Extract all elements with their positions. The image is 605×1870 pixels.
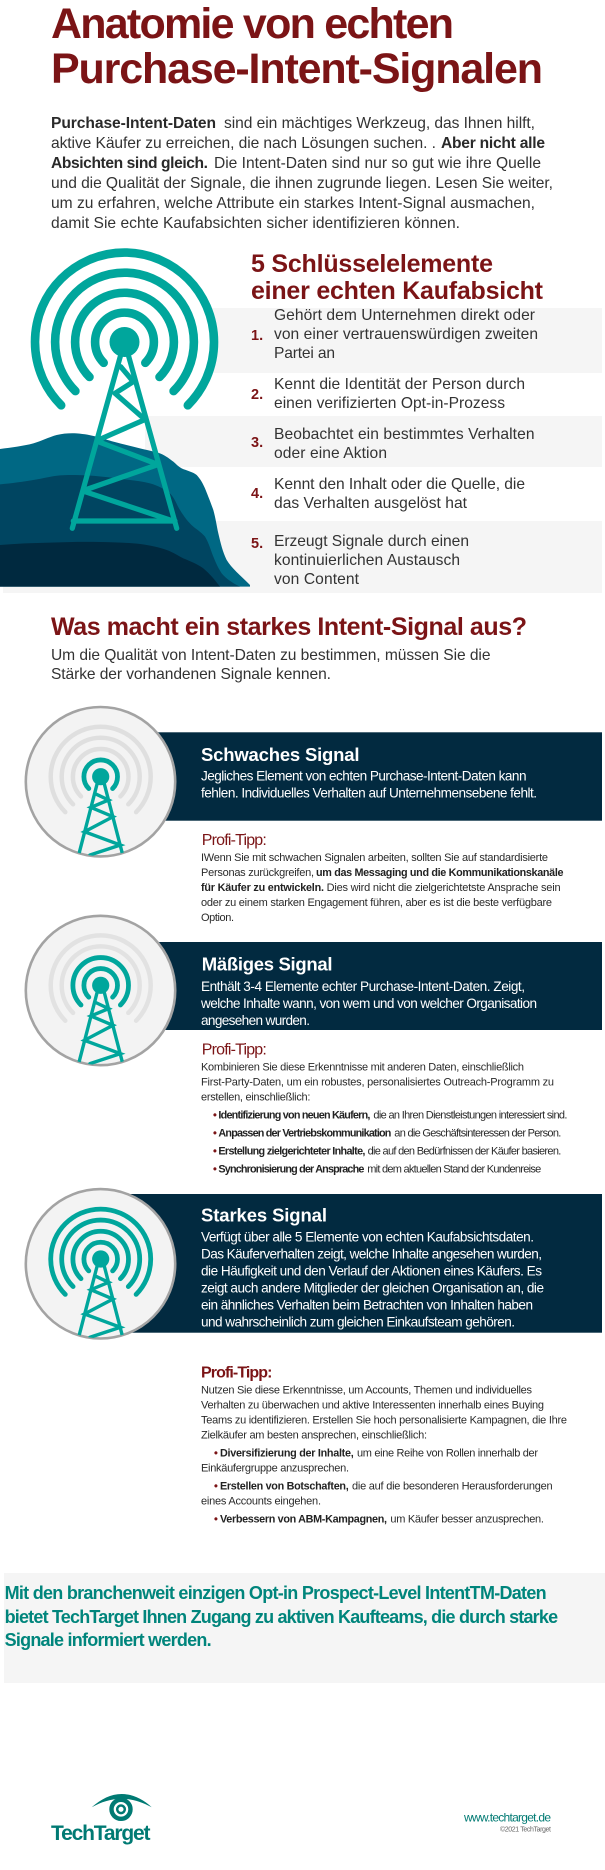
intro paragraph: um zu erfahren, welche Attribute ein starkes Intent-Signal ausmachen, bbox=[51, 195, 535, 212]
pro tip: moderate signal bbox=[201, 1042, 567, 1176]
pro tip: strong signal: • bbox=[214, 1481, 218, 1493]
panel: closing statement bbox=[4, 1573, 605, 1683]
list item 5: Erzeugt Signale durch einen bbox=[274, 533, 469, 550]
strong signal description bbox=[201, 1230, 544, 1330]
strong signal band bbox=[120, 1194, 602, 1333]
intro paragraph: aktive Käufer zu erreichen, die nach Lösungen suchen. . bbox=[51, 135, 436, 152]
pro tip: moderate signal: • bbox=[213, 1164, 217, 1176]
pro tip: strong signal: • bbox=[214, 1514, 218, 1526]
illustration: mountain bbox=[0, 433, 250, 587]
strong signal description: Verfügt über alle 5 Elemente von echten Kaufabsichtsdaten. bbox=[201, 1230, 534, 1245]
pro tip: strong signal: Verhalten zu überwachen und aktive Interessenten innerhalb eines Buying bbox=[201, 1400, 544, 1412]
list item 2 bbox=[251, 376, 525, 412]
pro tip: strong signal: eines Accounts eingehen. bbox=[201, 1496, 321, 1508]
strong signal description: ein ähnliches Verhalten beim Betrachten von Inhalten haben bbox=[201, 1298, 533, 1313]
pro tip: moderate signal: Identifizierung von neuen Käufern, bbox=[218, 1110, 370, 1122]
pro tip: strong signal: Erstellen von Botschaften, bbox=[220, 1481, 349, 1493]
pro tip: moderate signal: Kombinieren Sie diese Erkenntnisse mit anderen Daten, einschließlich bbox=[201, 1062, 524, 1074]
list item 1: Partei an bbox=[274, 345, 335, 362]
heading: 5 key elements bbox=[251, 250, 544, 305]
moderate signal description: Enthält 3-4 Elemente echter Purchase-Intent-Daten. Zeigt, bbox=[201, 979, 525, 994]
moderate signal description: angesehen wurden. bbox=[201, 1013, 310, 1028]
pro tip: strong signal: Teams zu identifizieren. Erstellen Sie hoch personalisierte Kampagnen, die Ihre bbox=[201, 1415, 567, 1427]
panel: list background bands bbox=[3, 308, 602, 593]
pro tip: moderate signal: Synchronisierung der Ansprache bbox=[218, 1164, 364, 1176]
list item 1: von einer vertrauenswürdigen zweiten bbox=[274, 326, 538, 343]
intro paragraph: Aber nicht alle bbox=[441, 135, 545, 152]
pro tip: weak signal: für Käufer zu entwickeln. bbox=[201, 882, 324, 894]
logo: TechTarget: TechTarget bbox=[51, 1822, 150, 1845]
intro paragraph: Purchase-Intent-Daten bbox=[51, 115, 216, 132]
icon: strong signal tower bbox=[26, 1189, 175, 1341]
list item 2: einen verifizierten Opt-in-Prozess bbox=[274, 395, 505, 412]
panel: moderate signal bbox=[26, 916, 602, 1067]
icon: radio tower bbox=[72, 355, 177, 528]
panel: closing statement: Mit den branchenweit einzigen Opt-in Prospect-Level IntentTM-Daten bbox=[5, 1583, 547, 1603]
pro tip: weak signal: Profi-Tipp: bbox=[202, 832, 267, 849]
list item 5: 5. bbox=[251, 536, 263, 552]
subheading text: Stärke der vorhandenen Signale kennen. bbox=[51, 666, 331, 683]
list item 1: 1. bbox=[251, 328, 263, 344]
weak signal band bbox=[120, 732, 602, 821]
list item 2: Kennt die Identität der Person durch bbox=[274, 376, 525, 393]
pro tip: moderate signal: Anpassen der Vertriebskommunikation bbox=[218, 1128, 391, 1140]
pro tip: strong signal: Verbessern von ABM-Kampagnen, bbox=[220, 1514, 387, 1526]
logo: TechTarget bbox=[51, 1794, 152, 1845]
intro paragraph: Die Intent-Daten sind nur so gut wie ihre Quelle bbox=[214, 155, 541, 172]
heading: strong signal question: Was macht ein starkes Intent-Signal aus? bbox=[51, 613, 527, 641]
pro tip: moderate signal: Profi-Tipp: bbox=[202, 1042, 267, 1059]
list item 4: 4. bbox=[251, 486, 263, 502]
list item 3: 3. bbox=[251, 435, 263, 451]
pro tip: strong signal bbox=[201, 1365, 567, 1526]
pro tip: moderate signal: die auf den Bedürfnissen der Käufer basieren. bbox=[368, 1146, 561, 1158]
title: Anatomie von echten bbox=[51, 0, 454, 48]
list item 1: Gehört dem Unternehmen direkt oder bbox=[274, 307, 535, 324]
subheading text bbox=[51, 647, 490, 683]
weak signal description bbox=[201, 769, 537, 801]
list item 4: das Verhalten ausgelöst hat bbox=[274, 495, 468, 512]
pro tip: strong signal: um eine Reihe von Rollen innerhalb der bbox=[357, 1448, 538, 1460]
heading: 5 key elements: einer echten Kaufabsicht bbox=[251, 277, 544, 305]
pro tip: strong signal: Zielkäufer am besten ansprechen, einschließlich: bbox=[201, 1430, 427, 1442]
pro tip: weak signal: IWenn Sie mit schwachen Signalen arbeiten, sollten Sie auf standardisierte bbox=[201, 852, 548, 864]
list item 2: 2. bbox=[251, 387, 263, 403]
panel: closing statement: bietet TechTarget Ihnen Zugang zu aktiven Kaufteams, die durch starke bbox=[5, 1607, 558, 1627]
title bbox=[51, 0, 543, 93]
footer: website and copyright: www.techtarget.de bbox=[463, 1811, 551, 1825]
pro tip: weak signal: oder zu einem starken Engagement führen, aber es ist die beste verfügbare bbox=[201, 897, 552, 909]
heading: 5 key elements: 5 Schlüsselelemente bbox=[251, 250, 493, 278]
list item 1 bbox=[251, 307, 538, 362]
intro paragraph: sind ein mächtiges Werkzeug, das Ihnen hilft, bbox=[224, 115, 535, 132]
icon: weak signal tower bbox=[26, 707, 175, 859]
moderate signal title: Mäßiges Signal bbox=[202, 954, 332, 975]
pro tip: strong signal: Einkäufergruppe anzusprechen. bbox=[201, 1463, 349, 1475]
subheading text: Um die Qualität von Intent-Daten zu bestimmen, müssen Sie die bbox=[51, 647, 490, 664]
pro tip: moderate signal: • bbox=[213, 1128, 217, 1140]
strong signal title: Starkes Signal bbox=[201, 1205, 327, 1226]
pro tip: weak signal: Dies wird nicht die zielgerichtetste Ansprache sein bbox=[327, 882, 561, 894]
list item 3 bbox=[251, 426, 534, 462]
pro tip: strong signal: • bbox=[214, 1448, 218, 1460]
pro tip: moderate signal: mit dem aktuellen Stand der Kundenreise bbox=[367, 1164, 541, 1176]
list item 5: von Content bbox=[274, 571, 360, 588]
weak signal description: fehlen. Individuelles Verhalten auf Unternehmensebene fehlt. bbox=[201, 786, 537, 801]
moderate signal description: welche Inhalte wann, von wem und von welcher Organisation bbox=[200, 996, 537, 1011]
pro tip: strong signal: Profi-Tipp: bbox=[201, 1365, 272, 1382]
list item 5 bbox=[251, 533, 469, 588]
pro tip: weak signal: Option. bbox=[201, 912, 234, 924]
strong signal description: Das Käuferverhalten zeigt, welche Inhalte angesehen wurden, bbox=[201, 1247, 542, 1262]
intro paragraph: Absichten sind gleich. bbox=[51, 155, 208, 172]
strong signal description: zeigt auch andere Mitglieder der gleichen Organisation an, die bbox=[201, 1281, 544, 1296]
weak signal title: Schwaches Signal bbox=[201, 744, 360, 765]
list item 3: Beobachtet ein bestimmtes Verhalten bbox=[274, 426, 534, 443]
panel: weak signal bbox=[26, 707, 602, 859]
pro tip: moderate signal: erstellen, einschließlich: bbox=[201, 1092, 310, 1104]
pro tip: strong signal: um Käufer besser anzusprechen. bbox=[390, 1514, 544, 1526]
pro tip: strong signal: die auf die besonderen Herausforderungen bbox=[352, 1481, 553, 1493]
pro tip: moderate signal: • bbox=[213, 1110, 217, 1122]
intro paragraph bbox=[51, 115, 553, 232]
pro tip: moderate signal: die an Ihren Dienstleistungen interessiert sind. bbox=[373, 1110, 567, 1122]
pro tip: weak signal bbox=[201, 832, 564, 924]
panel: strong signal bbox=[26, 1189, 602, 1341]
list item 4 bbox=[251, 476, 525, 512]
pro tip: weak signal: Personas zurückgreifen, bbox=[201, 867, 314, 879]
icon: moderate signal tower bbox=[26, 916, 175, 1067]
panel: closing statement: Signale informiert werden. bbox=[5, 1630, 212, 1650]
pro tip: strong signal: Nutzen Sie diese Erkenntnisse, um Accounts, Themen und individuelles bbox=[201, 1385, 532, 1397]
pro tip: weak signal: um das Messaging und die Kommunikationskanäle bbox=[316, 867, 564, 879]
strong signal description: die Häufigkeit und den Verlauf der Aktionen eines Käufers. Es bbox=[201, 1264, 542, 1279]
footer: website and copyright bbox=[463, 1811, 551, 1834]
list item 5: kontinuierlichen Austausch bbox=[274, 552, 460, 569]
moderate signal description bbox=[200, 979, 537, 1028]
title: Purchase-Intent-Signalen bbox=[51, 45, 543, 93]
footer: website and copyright: ©2021 TechTarget bbox=[500, 1826, 551, 1834]
pro tip: moderate signal: • bbox=[213, 1146, 217, 1158]
intro paragraph: damit Sie echte Kaufabsichten sicher identifizieren können. bbox=[51, 215, 460, 232]
moderate signal band bbox=[120, 942, 602, 1030]
weak signal description: Jegliches Element von echten Purchase-Intent-Daten kann bbox=[201, 769, 526, 784]
icon: signal arcs bbox=[35, 253, 214, 405]
pro tip: moderate signal: Erstellung zielgerichteter Inhalte, bbox=[218, 1146, 365, 1158]
strong signal description: und wahrscheinlich zum gleichen Einkaufsteam gehören. bbox=[201, 1315, 515, 1330]
pro tip: moderate signal: an die Geschäftsinteressen der Person. bbox=[394, 1128, 561, 1140]
list item 3: oder eine Aktion bbox=[274, 445, 387, 462]
intro paragraph: und die Qualität der Signale, die ihnen zugrunde liegen. Lesen Sie weiter, bbox=[51, 175, 553, 192]
list item 4: Kennt den Inhalt oder die Quelle, die bbox=[274, 476, 525, 493]
pro tip: moderate signal: First-Party-Daten, um ein robustes, personalisiertes Outreach-Programm zu bbox=[201, 1077, 554, 1089]
pro tip: strong signal: Diversifizierung der Inhalte, bbox=[220, 1448, 354, 1460]
